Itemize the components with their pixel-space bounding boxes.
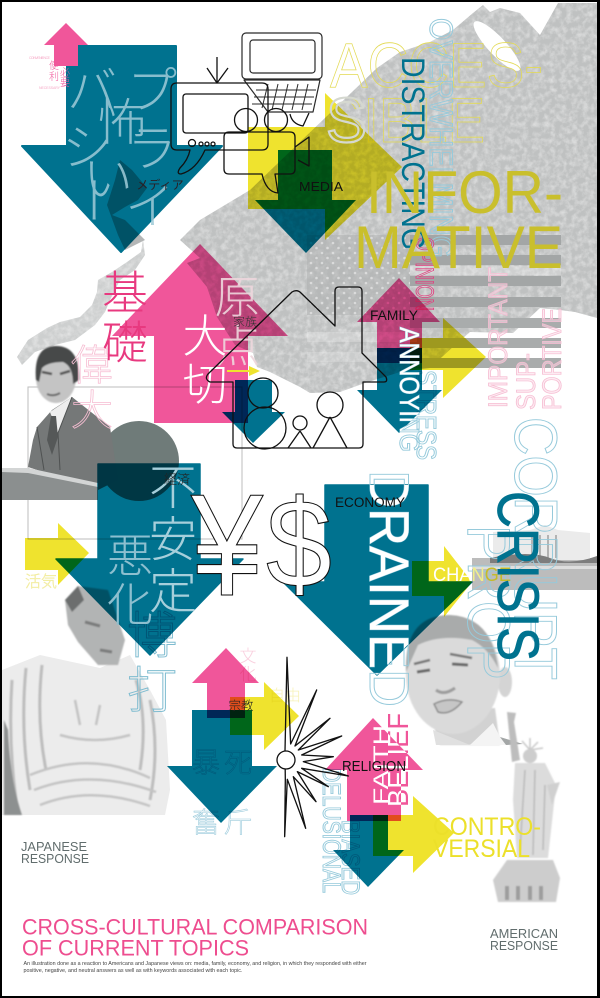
keyword: 暴奮斤: 斤 <box>224 807 252 838</box>
arrow: religion neutral American <box>373 796 454 873</box>
keywords: プライバシー 怖い: ー <box>64 175 120 225</box>
keyword: 文化: 文 <box>240 647 256 666</box>
keyword: CHANGE: CHANGE <box>433 565 511 586</box>
keywords: 不安定: 定 <box>149 566 197 619</box>
keyword: ANNOYING: ANNOYING <box>394 327 425 452</box>
keyword: 暴奮斤 <box>192 747 252 838</box>
label: MEDIA: MEDIA <box>299 179 343 194</box>
keyword: 博打: 打 <box>127 663 177 719</box>
keyword: STRESS: STRESS <box>411 370 442 460</box>
keyword: DRAINED: DRAINED <box>358 470 421 707</box>
keywords: 便利 必要: 必 <box>60 67 70 79</box>
keyword: ACCES-SIBLE: SIBLE <box>326 86 485 156</box>
label: ECONOMY: ECONOMY <box>335 495 405 510</box>
arrow: family small yellow <box>227 366 260 376</box>
keywords: プライバシー 怖い <box>62 63 177 235</box>
keywords: 原点: 原 <box>214 272 260 323</box>
keyword: 博打: 博 <box>127 608 177 664</box>
keyword: 暴奮斤: 死 <box>224 747 252 778</box>
keywords: 不安定 <box>149 462 197 619</box>
keywords: 便利 必要: 要 <box>60 77 70 89</box>
keywords: FAITH BELIEF <box>374 714 408 805</box>
keywords: 原点: 点 <box>215 321 261 372</box>
keyword: INFORMATIVE <box>354 159 563 281</box>
keyword: 偉大 <box>71 342 113 434</box>
photo: American flag overlay <box>307 235 561 368</box>
arrow: religion negative American <box>333 815 404 887</box>
title: OF CURRENT TOPICS <box>22 936 249 960</box>
arrow: family American yellow <box>410 318 486 398</box>
label: AMERICAN RESPONSE <box>490 926 558 953</box>
keywords: 基礎: 基 <box>102 267 148 319</box>
icon: house outline with family <box>206 287 387 449</box>
arrow: family positive large <box>112 244 288 423</box>
keywords: 便利 必要: 利 <box>49 71 59 83</box>
keyword: 自由: 自由 <box>269 687 301 705</box>
keyword: BIASED: BIASED <box>336 820 364 895</box>
keywords: プライバシー 怖い: い <box>83 151 133 207</box>
keywords: 基礎 <box>102 267 148 369</box>
keywords: 大切: 切 <box>182 359 228 410</box>
keyword: PORTIVE: PORTIVE <box>537 308 567 410</box>
description <box>24 961 367 974</box>
keyword: 博打 <box>127 608 177 719</box>
keyword: OVERWHELMING: OVERWHELMING <box>423 18 459 258</box>
keyword: IMPORTANT: IMPORTANT <box>483 267 513 408</box>
keywords: 悪化: 悪 <box>107 530 153 582</box>
keyword: CONTROVERSIAL: CONTRO- <box>433 813 541 841</box>
icon: television with antenna <box>171 57 268 174</box>
keywords: 大切: 大 <box>182 311 228 362</box>
keywords: FAITH BELIEF: FAITH <box>370 725 393 805</box>
arrow: media negative small <box>255 150 356 253</box>
keywords: 大切 <box>182 311 228 410</box>
keyword: INFORMATIVE: INFOR- <box>366 159 563 226</box>
keywords: プライバシー 怖い: ラ <box>127 121 177 177</box>
keyword: 暴奮斤: 奮 <box>192 807 220 838</box>
icon: laptop <box>242 33 322 112</box>
keywords: プライバシー 怖い: バ <box>67 63 117 119</box>
description: An illustration done as a reaction to Americans and Japanese views on: media, family, economy, and religion, in which they responded with either <box>24 961 367 967</box>
keywords: プライバシー 怖い: 怖 <box>97 95 147 151</box>
keywords: 悪化 <box>107 530 153 631</box>
label: AMERICAN RESPONSE: AMERICAN <box>490 926 558 941</box>
title: CROSS-CULTURAL COMPARISON <box>22 914 368 940</box>
arrow: religion negative Japanese <box>167 710 277 823</box>
photo: Statue of Liberty <box>493 712 560 902</box>
keyword: SUP-: SUP- <box>511 353 541 410</box>
label: JAPANESE RESPONSE: JAPANESE <box>21 839 87 854</box>
keyword: DELUSIONAL: DELUSIONAL <box>317 768 345 893</box>
keyword: ANNOYING <box>399 326 420 451</box>
keywords: FAITH BELIEF: BELIEF <box>383 713 415 807</box>
keyword: 暴奮斤: 暴 <box>192 747 220 778</box>
keyword: INFORMATIVE: MATIVE <box>354 214 563 281</box>
arrow: family American negative <box>357 348 442 433</box>
arrow: religion positive Japanese <box>192 648 259 718</box>
arrow: economy negative Japanese <box>56 464 243 655</box>
label: 経済: 経済 <box>164 472 190 487</box>
keyword: DRAINED: DRAINED <box>358 470 421 707</box>
keyword: ACCES-SIBLE: ACCES- <box>330 31 543 101</box>
label: メディア: メディア <box>136 177 184 192</box>
keywords: 基礎: 礎 <box>102 317 148 369</box>
keyword: CONTROVERSIAL: VERSIAL <box>433 835 530 863</box>
keyword: 活気: 活気 <box>25 573 57 591</box>
description: positive, negative, and neutral answers as well as with keywords associated with each topic. <box>24 968 242 974</box>
keyword: ACCES-SIBLE <box>326 31 543 156</box>
arrow: economy negative American <box>283 485 472 675</box>
arrow: economy neutral yellow <box>25 523 89 585</box>
keyword: letter S of SIBLE over the arrow: S <box>326 86 367 156</box>
arrow: religion neutral Japanese <box>230 682 299 750</box>
keywords: 便利 必要 <box>29 56 70 90</box>
keyword: PROP: PROP <box>455 525 522 680</box>
keyword: 文化 <box>240 647 256 684</box>
keywords: プライバシー 怖い: イ <box>125 179 175 235</box>
keywords: 不安定: 安 <box>149 514 197 567</box>
keyword: 文化: 化 <box>240 665 256 684</box>
keyword: 偉大: 偉 <box>71 342 113 389</box>
icon: starburst <box>277 657 348 837</box>
arrow: media positive pink overlay <box>54 45 78 66</box>
keywords: 便利 必要: NECESSARY <box>39 86 61 90</box>
title <box>22 914 368 960</box>
keyword: CONTROVERSIAL <box>433 813 541 863</box>
keywords: 便利 必要: 便 <box>49 59 59 72</box>
keywords: 原点 <box>214 272 261 372</box>
label: FAMILY: FAMILY <box>370 308 418 323</box>
arrow: media neutral yellow <box>248 93 402 240</box>
keyword: DRAINED <box>369 474 409 705</box>
photo: White House <box>472 525 597 590</box>
keyword: ANNOYING: ANNOYING <box>394 327 425 452</box>
label: AMERICAN RESPONSE: RESPONSE <box>490 938 558 953</box>
keywords: プライバシー 怖い: プ <box>127 63 177 119</box>
photo: Taro Aso at a podium <box>2 346 242 539</box>
arrow: family American positive <box>357 278 440 363</box>
keyword: DISTRACTING: DISTRACTING <box>395 57 431 250</box>
label: RELIGION: RELIGION <box>342 758 406 775</box>
photo: Great Buddha statue <box>2 586 170 815</box>
keyword: CORRUPT: CORRUPT <box>502 417 569 680</box>
keywords: 不安定: 不 <box>149 462 197 515</box>
keyword: CRISIS: CRISIS <box>485 491 550 661</box>
keyword: 偉大: 大 <box>71 387 113 434</box>
arrow: economy neutral yellow American <box>412 546 472 617</box>
icon: yen symbol: ¥ <box>190 464 263 626</box>
keyword: OPINION: OPINION <box>410 237 438 311</box>
icon: dollar symbol: $ <box>266 475 332 614</box>
keywords: プライバシー 怖い: シ <box>62 120 112 176</box>
photo: Barack Obama <box>406 615 523 745</box>
keywords: FAITH BELIEF: BELIEF <box>383 713 415 807</box>
photo: satellite map of the Pacific rim <box>17 3 597 393</box>
arrow: religion positive American <box>325 718 423 821</box>
label: 宗教: 宗教 <box>228 699 254 713</box>
keywords: 悪化: 化 <box>107 579 153 631</box>
arrow: media negative large <box>22 46 222 252</box>
label: JAPANESE RESPONSE <box>21 839 89 866</box>
icon: people talking in speech bubbles <box>224 108 309 193</box>
arrow: family negative small <box>222 380 285 443</box>
arrow: media positive small <box>44 23 88 66</box>
label: 家族: 家族 <box>233 315 257 329</box>
keywords: 便利 必要: CONVENIENCE <box>29 56 51 60</box>
label: JAPANESE RESPONSE: RESPONSE <box>21 851 89 866</box>
